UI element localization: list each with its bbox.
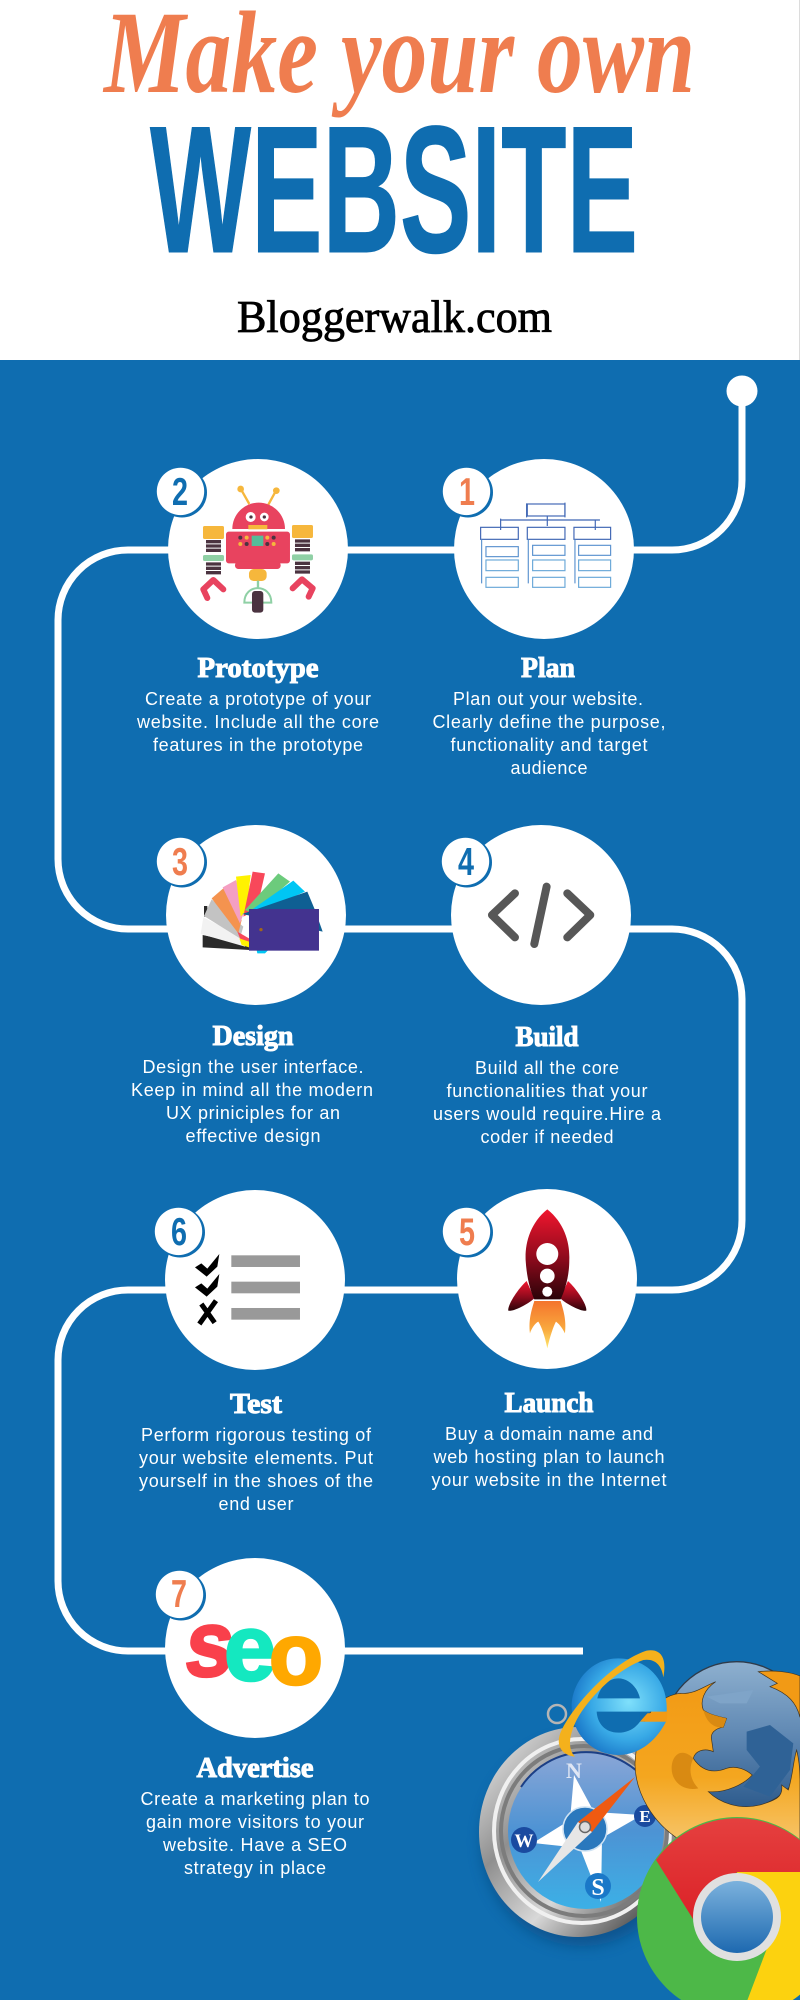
heading: Design: Design — [212, 1021, 294, 1052]
badge 6: 6 — [171, 1211, 187, 1254]
text: Plan description: functionality and target — [450, 735, 648, 755]
icon: code brackets — [492, 887, 590, 944]
text: Advertise description: gain more visitors to your — [146, 1812, 364, 1832]
text: Design description — [131, 1057, 373, 1146]
icon: SEO letters — [181, 1591, 323, 1703]
icon: SEO letters: s — [181, 1591, 240, 1696]
badge 1 — [443, 468, 493, 518]
badge 4 — [442, 838, 492, 888]
text: Prototype description: website. Include all the core — [136, 712, 379, 732]
badge 6 — [155, 1208, 205, 1258]
heading: Test: Test — [230, 1389, 283, 1420]
step 3: Design — [131, 825, 373, 1146]
icon: SEO letters: o — [269, 1606, 323, 1703]
text: Test description: yourself in the shoes of the — [139, 1471, 373, 1491]
text: Test description: your website elements. Put — [139, 1448, 373, 1468]
browser icons cluster — [479, 1650, 800, 2000]
subtitle: Bloggerwalk.com: Bloggerwalk.com — [237, 292, 552, 342]
text: Build description: users would require.Hire a — [433, 1104, 662, 1124]
icon: SEO letters: e — [224, 1595, 276, 1700]
badge 2: 2 — [172, 471, 188, 514]
step 7: Advertise — [140, 1558, 370, 1878]
text: Advertise description: Create a marketing plan to — [140, 1789, 370, 1809]
badge 5: 5 — [459, 1211, 475, 1254]
icon: Firefox — [635, 1662, 800, 1840]
text: Plan description: Clearly define the purpose, — [432, 712, 666, 732]
text: Advertise description: website. Have a SEO — [162, 1835, 347, 1855]
text: Test description: Perform rigorous testing of — [141, 1425, 372, 1445]
icon: rocket — [508, 1209, 586, 1348]
text: Plan description: Plan out your website. — [453, 689, 643, 709]
text: Plan description: audience — [510, 758, 588, 778]
text: Design description: Keep in mind all the modern — [131, 1080, 373, 1100]
header — [102, 0, 695, 342]
text: Build description: functionalities that your — [446, 1081, 648, 1101]
text: Advertise description: strategy in place — [184, 1858, 326, 1878]
text: Advertise description — [140, 1789, 370, 1878]
text: Build description: Build all the core — [475, 1058, 619, 1078]
text: Launch description: web hosting plan to launch — [432, 1447, 664, 1467]
icon: sitemap sketch — [481, 503, 611, 587]
heading: Plan: Plan — [521, 653, 575, 684]
text: Launch description: Buy a domain name and — [445, 1424, 653, 1444]
icon: Chrome — [637, 1817, 800, 2000]
badge 5 — [443, 1208, 493, 1258]
text: Design description: effective design — [186, 1126, 320, 1146]
heading: Build: Build — [516, 1022, 579, 1053]
icon: Internet Explorer — [559, 1650, 667, 1757]
step 2: Prototype — [136, 459, 379, 755]
step 6: Test — [139, 1190, 373, 1514]
heading: Launch: Launch — [504, 1388, 594, 1419]
icon: checklist — [195, 1254, 300, 1324]
text: Build description — [433, 1058, 662, 1147]
step 4: Build — [433, 825, 662, 1147]
text: Design description: UX priniciples for an — [166, 1103, 340, 1123]
heading: Advertise: Advertise — [196, 1753, 314, 1784]
badge 1: 1 — [459, 471, 475, 514]
text: Prototype description: Create a prototype of your — [145, 689, 371, 709]
icon: Safari compass: W — [514, 1831, 534, 1852]
badge 7 — [156, 1570, 206, 1620]
text: Launch description — [432, 1424, 666, 1490]
badge 3: 3 — [172, 841, 188, 884]
icon: colour swatches — [201, 872, 323, 953]
step 5: Launch — [432, 1189, 666, 1490]
badge 3 — [157, 838, 207, 888]
text: Launch description: your website in the Internet — [432, 1470, 666, 1490]
text: Design description: Design the user interface. — [142, 1057, 364, 1077]
heading: Prototype: Prototype — [198, 653, 318, 684]
step 1: Plan — [432, 459, 666, 778]
icon: Safari compass: E — [639, 1807, 651, 1826]
text: Prototype description — [136, 689, 379, 755]
badge 7: 7 — [171, 1573, 187, 1616]
icon: robot — [203, 486, 313, 613]
badge 4: 4 — [458, 841, 474, 884]
badge 2 — [157, 468, 207, 518]
connector path with start dot — [58, 376, 758, 1651]
text: Prototype description: features in the prototype — [153, 735, 363, 755]
icon: Safari compass: S — [591, 1875, 605, 1901]
icon: Safari compass — [479, 1705, 682, 1946]
text: Plan description — [432, 689, 666, 778]
text: Test description — [139, 1425, 373, 1514]
text: Test description: end user — [218, 1494, 294, 1514]
text: Build description: coder if needed — [480, 1127, 614, 1147]
icon: Safari compass: N — [566, 1758, 582, 1783]
